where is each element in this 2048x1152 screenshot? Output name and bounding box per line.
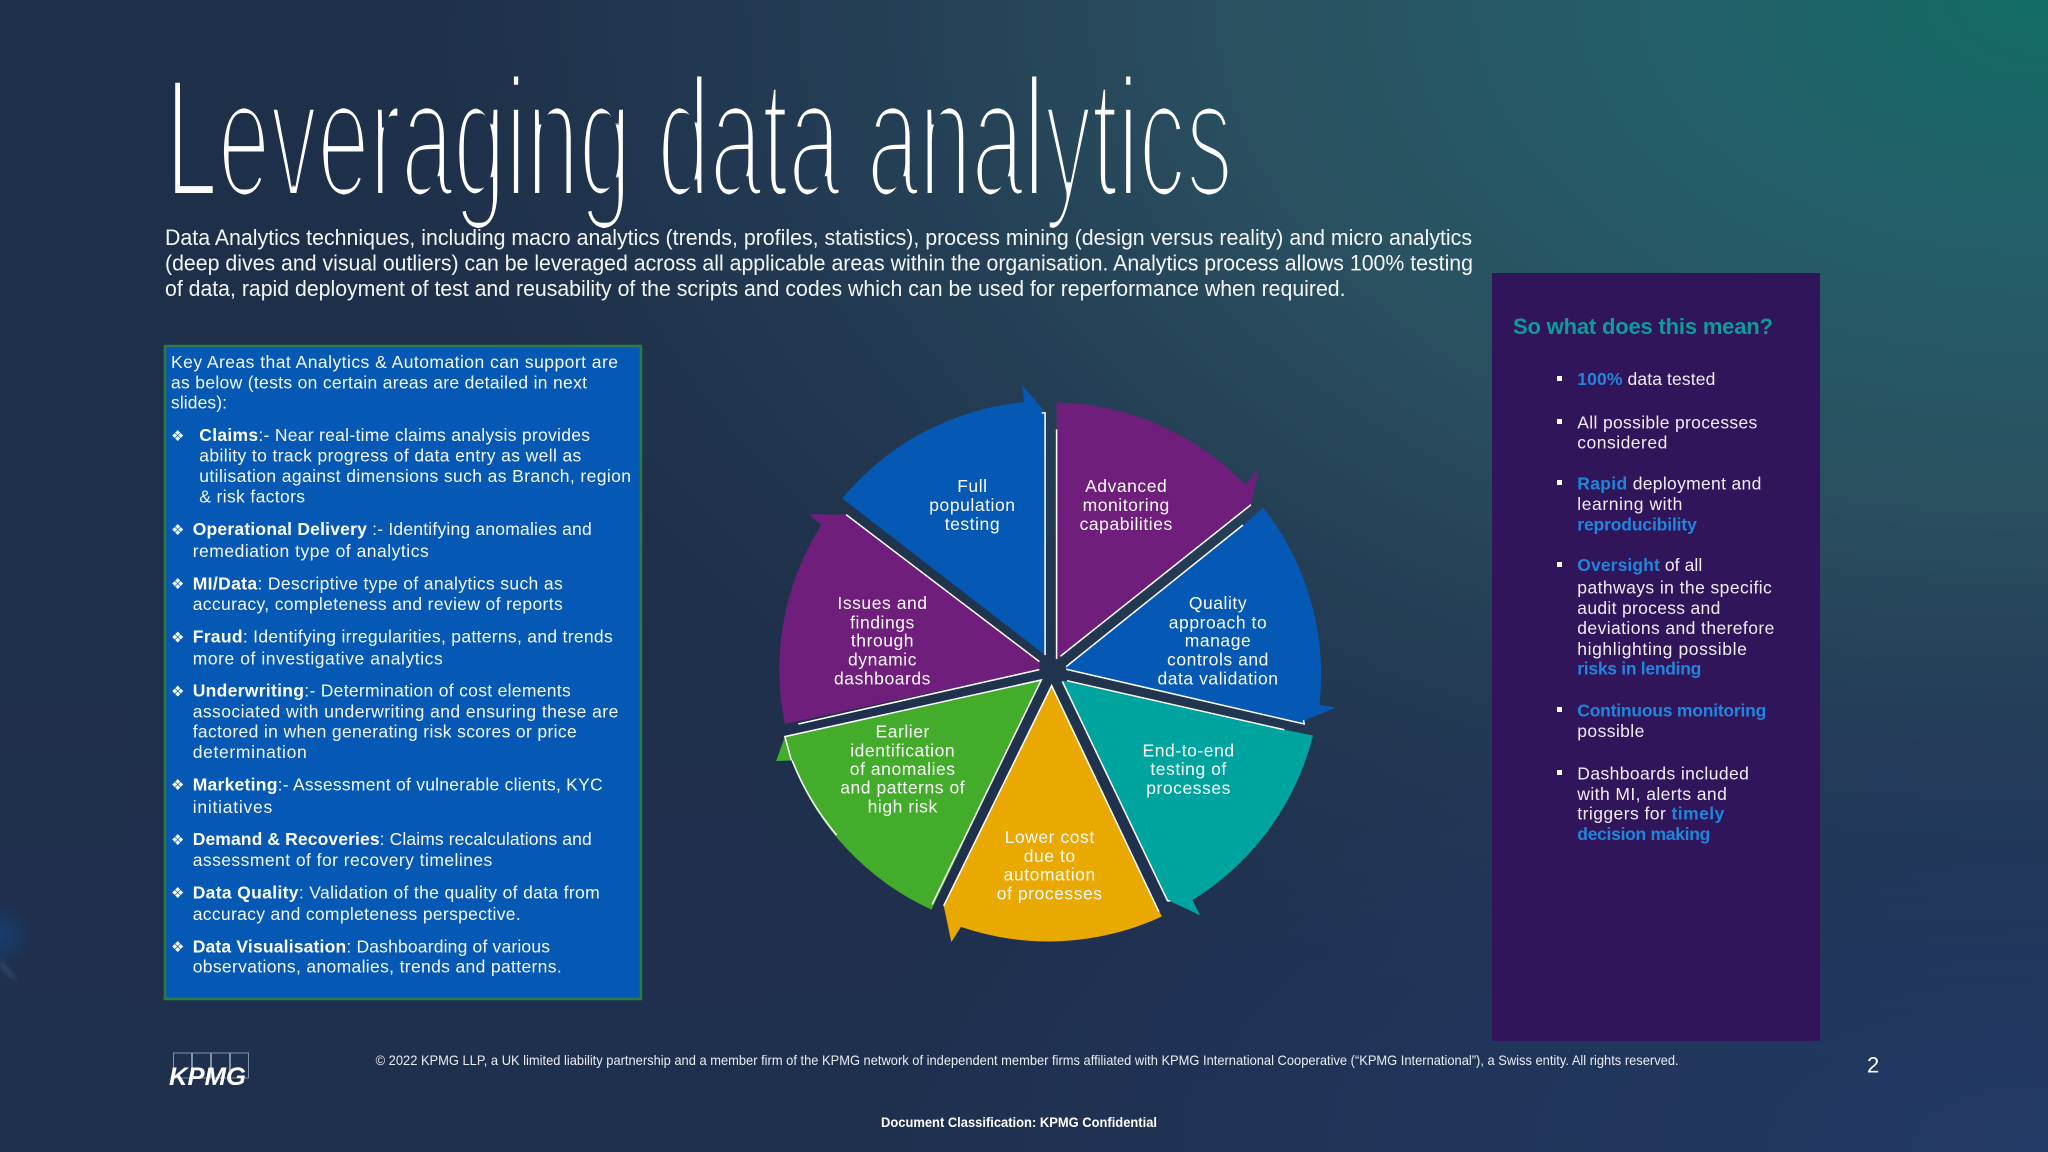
point: dashboards: triggers for timely: [1577, 804, 1725, 824]
label: quality approach: manage: [1185, 631, 1251, 651]
point: dashboards: [1557, 764, 1749, 844]
item: underwriting: ❖: [171, 682, 184, 700]
label: lower cost: automation: [1004, 864, 1096, 884]
label: earlier identification: high risk: [868, 796, 938, 816]
item: fraud: [171, 627, 613, 668]
point: rapid deployment: Rapid deployment and: [1577, 474, 1761, 494]
segment: issues and findings: [779, 514, 1039, 724]
point: oversight: Oversight of all: [1577, 555, 1702, 575]
intro text block: Data Analytics techniques, including macro analytics (trends, profiles, statistics), process mining (design versus reality) and micro analytics: [165, 225, 1472, 250]
page number: 2: [1867, 1052, 1879, 1078]
item: claims: Claims:- Near real-time claims analysis provides: [199, 425, 590, 445]
item: data visualisation: Data Visualisation: Dashboarding of various: [193, 936, 550, 956]
label: issues and findings: findings: [850, 612, 915, 632]
label: lower cost: Lower cost: [1005, 827, 1095, 847]
item: MI/data: ❖: [171, 575, 184, 593]
item: demand and recoveries: assessment of for recovery timelines: [193, 850, 493, 870]
key areas intro: slides):: [171, 392, 227, 412]
panel: so what does this mean: [1492, 273, 1820, 1041]
point: rapid deployment: [1557, 474, 1761, 535]
label: earlier identification: and patterns of: [840, 778, 965, 798]
point: all possible processes: [1557, 412, 1758, 453]
label: issues and findings: [834, 593, 931, 689]
label: lower cost: of processes: [997, 883, 1103, 903]
item: underwriting: factored in when generating risk scores or price: [193, 722, 577, 742]
logo: KPMG: KPMG: [169, 1063, 246, 1091]
label: quality approach: approach to: [1169, 612, 1267, 632]
item: marketing: Marketing:- Assessment of vulnerable clients, KYC: [193, 774, 603, 794]
point: dashboards: with MI, alerts and: [1576, 784, 1727, 804]
item: data quality: [171, 882, 600, 924]
point: continuous monitoring: possible: [1577, 721, 1644, 741]
item: marketing: ❖: [171, 776, 184, 794]
label: end-to-end testing: [1143, 740, 1235, 798]
item: fraud: ❖: [171, 628, 184, 646]
item: operational delivery: remediation type of analytics: [193, 541, 429, 561]
panel: key areas: [165, 346, 641, 999]
label: issues and findings: dashboards: [834, 669, 931, 689]
segment: end-to-end testing: [1062, 681, 1313, 915]
title: Leveraging data analytics: [166, 43, 1233, 232]
pie diagram: seven arrow segments: [776, 385, 1336, 942]
label: end-to-end testing: End-to-end: [1143, 740, 1235, 760]
item: claims: ❖: [171, 427, 184, 445]
logo: KPMG: [169, 1053, 248, 1091]
label: advanced monitoring capabilities: Advanced: [1085, 476, 1167, 496]
document classification: Document Classification: KPMG Confidential: [881, 1115, 1157, 1130]
point: oversight: deviations and therefore: [1577, 618, 1774, 638]
item: MI/data: accuracy, completeness and review of reports: [193, 594, 563, 614]
item: data quality: accuracy and completeness perspective.: [193, 904, 521, 924]
point: oversight: highlighting possible: [1577, 639, 1747, 659]
item: demand and recoveries: [171, 829, 592, 870]
item: underwriting: [171, 681, 618, 762]
label: quality approach: [1157, 593, 1279, 689]
point: 100% data tested: 100% data tested: [1577, 369, 1715, 389]
label: issues and findings: through: [851, 631, 914, 651]
point: continuous monitoring: [1557, 700, 1766, 741]
point: oversight: pathways in the specific: [1577, 578, 1772, 598]
item: demand and recoveries: ❖: [171, 831, 184, 849]
point: rapid deployment: learning with: [1577, 494, 1682, 514]
item: data visualisation: observations, anomalies, trends and patterns.: [193, 957, 562, 977]
key areas intro: [171, 352, 618, 412]
item: claims: & risk factors: [199, 486, 305, 506]
label: earlier identification: [840, 721, 965, 816]
item: fraud: Fraud: Identifying irregularities, patterns, and trends: [193, 627, 613, 647]
item: claims: [171, 425, 631, 506]
item: operational delivery: Operational Delivery :- Identifying anomalies and: [193, 519, 592, 539]
intro text block: [165, 225, 1473, 301]
point: all possible processes: All possible processes: [1577, 412, 1758, 432]
item: claims: utilisation against dimensions such as Branch, region: [199, 466, 631, 486]
item: MI/data: MI/Data: Descriptive type of analytics such as: [193, 573, 563, 593]
item: demand and recoveries: Demand & Recoveries: Claims recalculations and: [193, 829, 592, 849]
segment labels: [834, 476, 1279, 903]
label: issues and findings: dynamic: [848, 649, 917, 669]
item: data visualisation: ❖: [171, 938, 184, 956]
item: underwriting: determination: [193, 742, 307, 762]
item: operational delivery: [171, 519, 592, 561]
segment: lower cost: [944, 684, 1162, 942]
segment: quality approach: [1065, 508, 1336, 724]
label: issues and findings: Issues and: [837, 593, 928, 613]
label: quality approach: data validation: [1157, 669, 1279, 689]
label: full population testing: [929, 476, 1016, 534]
point: oversight: audit process and: [1577, 598, 1720, 618]
item: underwriting: Underwriting:- Determination of cost elements: [193, 681, 571, 701]
item: fraud: more of investigative analytics: [193, 648, 443, 668]
label: full population testing: population: [929, 495, 1016, 515]
panel heading: So what does this mean?: [1513, 314, 1773, 339]
point: dashboards: Dashboards included: [1577, 764, 1749, 784]
point: dashboards: decision making: [1577, 824, 1710, 844]
label: earlier identification: identification: [850, 740, 955, 760]
item: data quality: ❖: [171, 884, 184, 902]
item: operational delivery: ❖: [171, 521, 184, 539]
item: claims: ability to track progress of data entry as well as: [199, 446, 582, 466]
item: data visualisation: [171, 936, 562, 977]
label: advanced monitoring capabilities: [1080, 476, 1173, 534]
item: data quality: Data Quality: Validation of the quality of data from: [193, 882, 600, 902]
key areas intro: Key Areas that Analytics & Automation can support are: [171, 352, 618, 372]
label: lower cost: [997, 827, 1103, 903]
label: earlier identification: Earlier: [875, 721, 930, 741]
segment: full population testing: [842, 385, 1045, 655]
label: end-to-end testing: testing of: [1150, 759, 1227, 779]
label: advanced monitoring capabilities: capabilities: [1080, 514, 1173, 534]
label: lower cost: due to: [1024, 846, 1076, 866]
intro text block: of data, rapid deployment of test and reusability of the scripts and codes which can be used for reperformance when required.: [165, 276, 1346, 301]
label: quality approach: Quality: [1189, 593, 1247, 613]
label: full population testing: testing: [945, 514, 1000, 534]
point: all possible processes: considered: [1577, 433, 1667, 453]
label: advanced monitoring capabilities: monitoring: [1083, 495, 1170, 515]
item: MI/data: [171, 573, 563, 614]
point: oversight: risks in lending: [1577, 658, 1701, 678]
label: end-to-end testing: processes: [1146, 778, 1231, 798]
point: oversight: [1557, 555, 1774, 678]
intro text block: (deep dives and visual outliers) can be leveraged across all applicable areas within the organisation. Analytics process allows 100% testing: [165, 250, 1473, 276]
point: rapid deployment: reproducibility: [1577, 515, 1697, 535]
segment: advanced monitoring: [1057, 403, 1259, 661]
item: marketing: initiatives: [193, 797, 273, 817]
segment: earlier identification: [776, 680, 1041, 910]
label: full population testing: Full: [957, 476, 988, 496]
item: marketing: [171, 774, 603, 817]
label: earlier identification: of anomalies: [850, 759, 956, 779]
footer copyright: © 2022 KPMG LLP, a UK limited liability partnership and a member firm of the KPMG network of independent member firms affiliated with KPMG International Cooperative (“KPMG International”), a Swiss entity. All rights reserved.: [376, 1052, 1679, 1068]
point: continuous monitoring: Continuous monitoring: [1577, 700, 1766, 720]
item: underwriting: associated with underwriting and ensuring these are: [193, 701, 618, 721]
label: quality approach: controls and: [1167, 649, 1269, 669]
key areas intro: as below (tests on certain areas are detailed in next: [171, 372, 587, 392]
